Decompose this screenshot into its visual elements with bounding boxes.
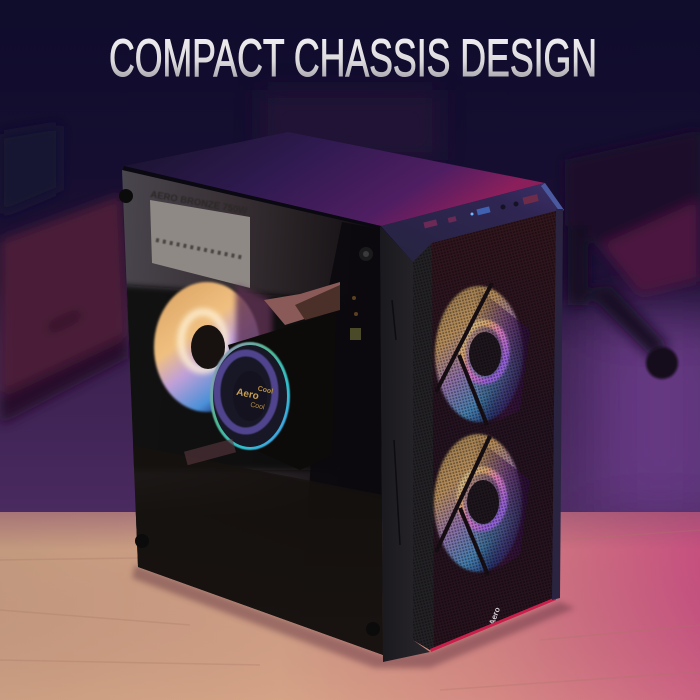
front right edge [552,209,563,600]
front bottom red edge [430,597,556,652]
motherboard reflections [264,282,361,340]
tempered glass side panel [119,170,383,655]
wooden desk [0,512,700,700]
top front fan [435,283,530,430]
lower case interior shade [134,475,382,655]
rear RGB fan [154,282,272,420]
bottom front fan [434,434,530,580]
blurred office chair [565,130,700,360]
Aerocool front logo: Aero [487,606,502,626]
blurred brick wall [260,90,440,160]
front top I/O band [381,183,564,262]
mesh front panel [413,209,563,652]
CPU cooler: Aero [235,387,260,402]
dark interior behind fan [122,285,345,470]
case top panel [124,132,545,226]
PSU label: AERO BRONZE 750W [150,189,248,216]
reflection dark wedge [310,222,382,655]
CPU cooler: Cool [250,402,266,412]
background floor glow [590,320,700,520]
background room [0,0,700,520]
case shadow on desk [132,565,575,668]
PSU label [150,189,250,288]
top edge shadow [122,166,381,232]
glass screws [119,189,380,636]
chair wheel [646,347,678,379]
I/O ports [423,194,539,228]
blurred shelf [0,125,128,425]
PC case [119,132,564,662]
CPU cooler [210,330,304,470]
front side bevel [380,226,430,662]
CPU cooler: Cool [257,385,274,396]
